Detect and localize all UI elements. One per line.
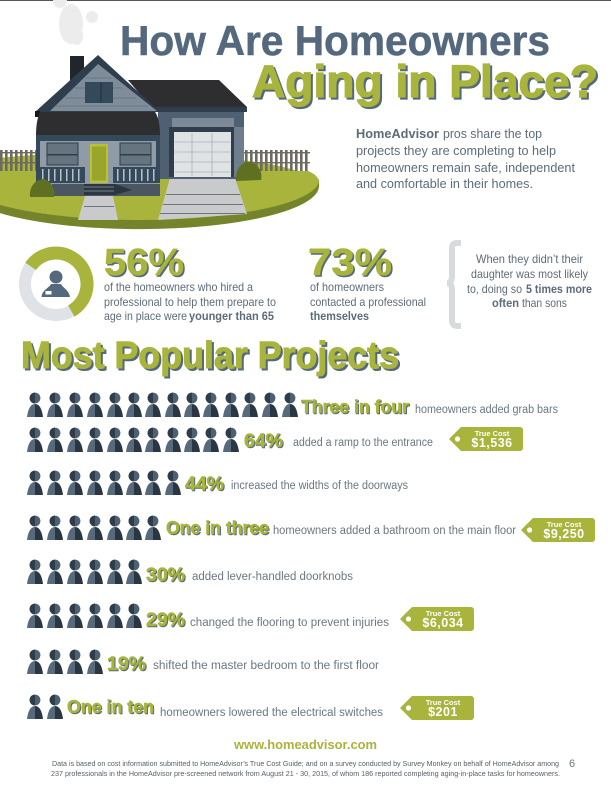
icon: contractor [42, 270, 70, 297]
bushes [30, 162, 261, 197]
footnote [51, 759, 560, 778]
stat: 56 percent text: 56% [106, 244, 186, 286]
brace [447, 243, 461, 326]
smoke [53, 0, 98, 45]
price tag: 9250 [521, 518, 595, 542]
stat: 73 percent: 73% [310, 244, 394, 286]
intro text: HomeAdvisor [356, 126, 439, 141]
porch base and steps [52, 184, 160, 196]
callout: daughters: to, doing so [467, 282, 522, 296]
callout: daughters: often [492, 296, 519, 310]
row: three in four: homeowners added grab bars [415, 404, 558, 416]
front door [90, 144, 108, 183]
price tag: 201 [400, 696, 474, 720]
row: one in three: One in three [167, 519, 270, 539]
driveway and walk [78, 178, 247, 220]
row: one in ten: One in ten [67, 697, 154, 717]
subtitle with shadow: Aging in Place? [254, 58, 600, 109]
porch railings [38, 167, 158, 183]
price tag: 1536: $1,536 [471, 436, 513, 450]
row: 29 percent: 29% [147, 611, 186, 632]
price tag: 6034 [400, 607, 474, 631]
garage roof [128, 80, 247, 112]
row: 64 percent [27, 428, 433, 453]
row: 30 percent: 30% [147, 566, 186, 587]
callout: daughters: than sons [522, 296, 567, 310]
row: 29 percent: changed the flooring to prevent injuries [190, 617, 389, 629]
title [120, 17, 600, 109]
row: three in four [27, 393, 558, 418]
price tag: 6034: $6,034 [422, 616, 464, 630]
row: 29 percent: 29% [146, 610, 185, 631]
illustration: house on lawn [0, 0, 319, 229]
gable [35, 55, 160, 117]
garage wall [158, 112, 244, 179]
row: one in three: homeowners added a bathroom on the main floor [273, 525, 516, 537]
porch [36, 112, 160, 184]
price tag: 201: True Cost [426, 698, 461, 707]
footnote: Data is based on cost information submitted to HomeAdvisor’s True Cost Guide; and on a survey conducted by Survey Monkey on behalf of HomeAdvisor among [52, 759, 559, 768]
stat: 56 percent text: of the homeowners who hired a [104, 280, 253, 294]
row: 44 percent [27, 471, 408, 496]
stat: 73 percent: contacted a professional [310, 295, 426, 309]
callout: daughters [467, 252, 592, 310]
row: 19 percent: 19% [108, 655, 147, 676]
row: three in four: Three in four [301, 397, 409, 417]
row: one in ten [27, 695, 383, 719]
stat: 73 percent: themselves [310, 309, 369, 323]
stat: 56 percent text: 56% [104, 242, 184, 284]
price tag: 1536 [449, 427, 523, 451]
intro text: pros share the top [443, 126, 542, 141]
row: 30 percent: 30% [146, 565, 185, 586]
row: one in ten: One in ten [68, 698, 155, 718]
windows [47, 143, 151, 165]
price tag: 201: $201 [428, 705, 458, 719]
row: three in four: Three in four [302, 398, 410, 418]
row: 64 percent: 64% [244, 431, 283, 452]
row: 19 percent: 19% [107, 654, 146, 675]
stat: 73 percent: 73% [308, 242, 392, 284]
intro text: homeowners remain safe, independent [356, 160, 575, 175]
heading: most popular projects: Most Popular Projects [21, 335, 399, 377]
heading: most popular projects: Most Popular Projects [23, 337, 401, 379]
row: 64 percent: added a ramp to the entrance [293, 437, 433, 449]
stat: 56 percent text: professional to help them prepare to [104, 295, 276, 309]
row: 19 percent: shifted the master bedroom to the first floor [153, 660, 379, 672]
subtitle with shadow: Aging in Place? [252, 56, 598, 107]
row: 30 percent: added lever-handled doorknobs [192, 571, 353, 583]
row: 44 percent: increased the widths of the doorways [231, 480, 408, 492]
chimney [70, 56, 84, 82]
stat: 56 percent donut [25, 253, 87, 315]
page number: 6 [569, 758, 575, 770]
row: 44 percent: 44% [186, 475, 225, 496]
stat: 56 percent text [104, 242, 276, 323]
row: 64 percent: 64% [245, 432, 284, 453]
intro text: projects they are completing to help [356, 143, 556, 158]
picket fence [0, 150, 310, 171]
stat: 56 percent text: age in place were [104, 309, 187, 323]
row: 30 percent [27, 560, 353, 587]
row: one in ten: homeowners lowered the electrical switches [160, 707, 383, 719]
row: 19 percent [27, 650, 379, 676]
intro text: and comfortable in their homes. [356, 176, 533, 191]
row: one in three: One in three [166, 518, 269, 538]
row: one in three [27, 516, 516, 540]
row: 29 percent [27, 604, 389, 632]
lawn [0, 171, 319, 229]
website: www.homeadvisor.com [233, 737, 377, 752]
stat: 73 percent: of homeowners [310, 280, 384, 294]
price tag: 9250: $9,250 [543, 527, 585, 541]
lawn hill behind fence [0, 153, 300, 172]
callout: daughters: 5 times more [526, 282, 592, 296]
intro text [356, 126, 575, 191]
price tag: 1536: True Cost [475, 429, 510, 438]
row: 44 percent: 44% [185, 474, 224, 495]
callout: daughters: daughter was most likely [471, 267, 588, 281]
callout: daughters: When they didn’t their [476, 252, 583, 266]
price tag: 9250: True Cost [547, 520, 582, 529]
price tag: 6034: True Cost [426, 609, 461, 618]
stat: 56 percent text: younger than 65 [189, 309, 274, 323]
title: How Are Homeowners [120, 17, 550, 64]
footnote: 237 professionals in the HomeAdvisor pre-screened network from August 21 - 30, 2015, of whom 186 reported completing aging-in-place tasks for homeowners. [51, 769, 560, 778]
stat: 73 percent [308, 242, 426, 323]
